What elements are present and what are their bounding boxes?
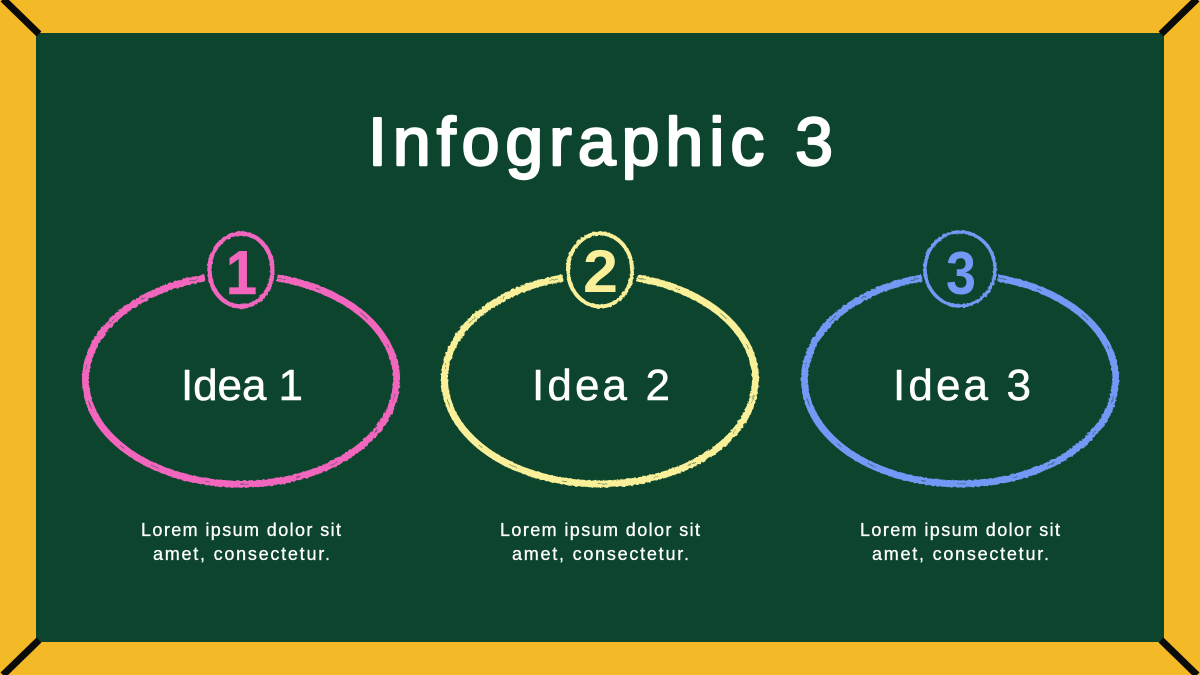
chalk oval: blue bbox=[804, 278, 1116, 484]
heading: idea 1: Idea 1 bbox=[181, 361, 303, 410]
text block: idea 2 description bbox=[500, 520, 700, 564]
number badge 3 bbox=[925, 232, 995, 307]
panel: idea 3 bbox=[804, 232, 1116, 564]
text block: idea 3 description: Lorem ipsum dolor sit bbox=[860, 520, 1060, 540]
number badge 2 bbox=[568, 234, 632, 306]
panel: idea 1 bbox=[86, 234, 397, 564]
text block: idea 1 description: amet, consectetur. bbox=[153, 544, 330, 564]
text block: idea 3 description: amet, consectetur. bbox=[872, 544, 1049, 564]
text block: idea 2 description: Lorem ipsum dolor sit bbox=[500, 520, 700, 540]
text block: idea 3 description bbox=[860, 520, 1060, 564]
number badge 2: 2 bbox=[583, 238, 618, 305]
heading: idea 3: Idea 3 bbox=[893, 361, 1031, 410]
chalk oval: pink bbox=[86, 278, 397, 484]
number badge 3: 3 bbox=[946, 240, 976, 307]
number badge 1 bbox=[210, 234, 272, 308]
panel: idea 2 bbox=[444, 234, 755, 564]
heading: idea 2: Idea 2 bbox=[532, 361, 670, 410]
text block: idea 1 description bbox=[141, 520, 341, 564]
text block: idea 1 description: Lorem ipsum dolor sit bbox=[141, 520, 341, 540]
number badge 1: 1 bbox=[226, 239, 257, 308]
text block: idea 2 description: amet, consectetur. bbox=[512, 544, 689, 564]
chalk oval: yellow bbox=[444, 278, 755, 484]
title: Infographic 3 bbox=[368, 104, 833, 180]
